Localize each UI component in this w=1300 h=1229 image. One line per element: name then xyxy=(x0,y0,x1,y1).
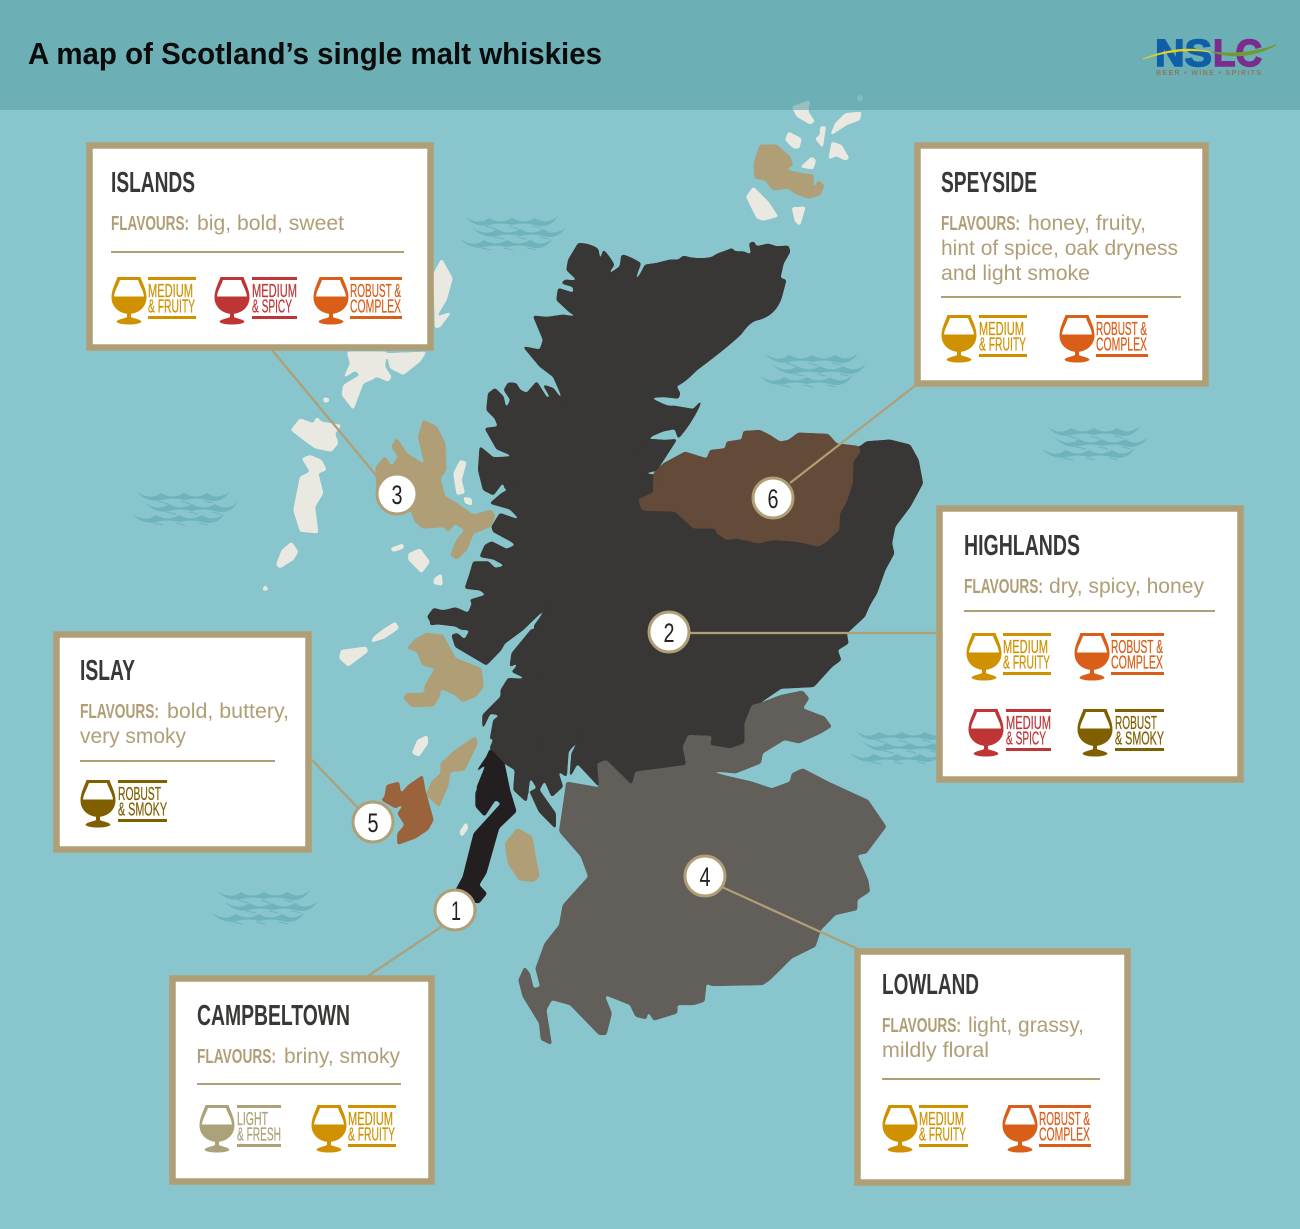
flavours: Speyside: and light smoke xyxy=(941,262,1090,285)
panel: Speyside xyxy=(918,146,1206,384)
flavours: Islay xyxy=(80,700,289,748)
flavours: Islay: bold, buttery, xyxy=(167,700,289,723)
flavours: Islands xyxy=(111,212,344,235)
flavours: Highlands: dry, spicy, honey xyxy=(1049,575,1204,598)
marker 6: 6 xyxy=(768,484,778,514)
badge: medium and fruity: & FRUITY xyxy=(1003,652,1050,672)
Shetland islands xyxy=(746,95,863,226)
flavours: Islay: FLAVOURS: xyxy=(80,701,159,723)
map: Highlands region xyxy=(427,242,923,828)
heading: Islay: ISLAY xyxy=(80,655,135,687)
map: Speyside region xyxy=(638,430,861,547)
badge: medium and fruity: & FRUITY xyxy=(348,1124,395,1144)
marker 4 xyxy=(685,856,725,896)
badge: medium and fruity: MEDIUM xyxy=(148,280,193,301)
waves decoration xyxy=(132,216,1148,924)
badge: medium and spicy: MEDIUM xyxy=(252,280,297,301)
badge: robust and smoky: & SMOKY xyxy=(118,798,167,820)
badge: robust and complex: ROBUST & xyxy=(1096,318,1147,339)
flavours: Speyside xyxy=(941,212,1178,285)
flavours: Highlands: FLAVOURS: xyxy=(964,576,1043,598)
marker 5: 5 xyxy=(368,808,378,838)
flavours: Campbeltown: FLAVOURS: xyxy=(197,1046,276,1068)
heading: Lowland: LOWLAND xyxy=(882,969,979,1001)
badge: robust and complex: ROBUST & xyxy=(350,280,401,301)
flavours: Highlands xyxy=(964,575,1204,598)
flavours: Campbeltown: briny, smoky xyxy=(284,1045,400,1068)
logo: NSLC: LC xyxy=(1213,33,1262,75)
badge: robust and smoky: & SMOKY xyxy=(1115,728,1164,748)
map: Islands region xyxy=(339,420,539,882)
badge: medium and spicy xyxy=(968,709,1051,756)
badge: medium and fruity xyxy=(941,315,1027,362)
badge: medium and fruity: & FRUITY xyxy=(979,334,1026,354)
flavours: Islands: FLAVOURS: xyxy=(111,213,189,235)
map: Campbeltown region (Kintyre) xyxy=(455,748,517,903)
heading: Speyside: SPEYSIDE xyxy=(941,167,1037,199)
badge: medium and fruity xyxy=(882,1105,968,1152)
panel: Campbeltown xyxy=(172,978,432,1182)
flavours: Speyside: hint of spice, oak dryness xyxy=(941,237,1178,260)
badge: medium and spicy: MEDIUM xyxy=(1006,712,1051,733)
badge: medium and spicy: & SPICY xyxy=(1006,728,1046,748)
badge: medium and fruity: MEDIUM xyxy=(919,1108,964,1129)
badge: medium and fruity: MEDIUM xyxy=(979,318,1024,339)
marker 2 xyxy=(649,612,689,652)
badge: medium and fruity xyxy=(311,1105,396,1152)
badge: robust and complex: COMPLEX xyxy=(1096,334,1147,354)
logo: NSLC: NS xyxy=(1155,33,1212,75)
flavours: Campbeltown xyxy=(197,1045,400,1068)
badge: robust and smoky: ROBUST xyxy=(1115,712,1157,733)
marker 4: 4 xyxy=(700,862,710,892)
badge: light and fresh: LIGHT xyxy=(237,1108,268,1129)
badge: medium and fruity: MEDIUM xyxy=(1003,636,1048,657)
flavours: Lowland: mildly floral xyxy=(882,1039,989,1062)
marker 1: 1 xyxy=(451,896,461,926)
logo: NSLC xyxy=(1143,33,1276,77)
badge: robust and complex xyxy=(313,277,402,324)
heading: Campbeltown: CAMPBELTOWN xyxy=(197,1000,350,1032)
badge: light and fresh: & FRESH xyxy=(237,1124,281,1144)
badge: robust and complex: COMPLEX xyxy=(1111,652,1163,672)
badge: medium and fruity xyxy=(111,277,196,324)
badge: medium and fruity xyxy=(966,633,1051,680)
header band xyxy=(0,0,1300,110)
badge: light and fresh xyxy=(199,1105,281,1152)
badge: robust and complex: ROBUST & xyxy=(1039,1108,1090,1129)
marker 3: 3 xyxy=(392,480,402,510)
map: Lowland region xyxy=(518,691,886,1045)
leader lines xyxy=(272,350,938,976)
badge: robust and smoky xyxy=(80,780,167,828)
marker 6 xyxy=(753,478,793,518)
badge: robust and smoky xyxy=(1077,709,1164,756)
Outer Hebrides xyxy=(262,258,472,591)
badge: robust and complex: COMPLEX xyxy=(350,296,401,316)
flavours: Speyside: FLAVOURS: xyxy=(941,213,1020,235)
map: Islay region xyxy=(381,775,434,845)
panel: Islands xyxy=(90,146,430,348)
panel: Islay xyxy=(56,634,308,850)
flavours: Islay: very smoky xyxy=(80,725,186,748)
badge: medium and spicy xyxy=(214,277,297,324)
map: western isles and Shetland xyxy=(262,95,863,591)
flavours: Lowland: FLAVOURS: xyxy=(882,1015,961,1037)
title: A map of Scotland’s single malt whiskies xyxy=(28,36,602,71)
marker 2: 2 xyxy=(664,618,674,648)
badge: medium and fruity: & FRUITY xyxy=(148,296,195,316)
badge: medium and fruity: & FRUITY xyxy=(919,1124,966,1144)
flavours: Lowland: light, grassy, xyxy=(968,1014,1084,1037)
badge: robust and complex: COMPLEX xyxy=(1039,1124,1090,1144)
badge: robust and complex xyxy=(1059,315,1148,362)
flavours: Islands: big, bold, sweet xyxy=(197,212,344,235)
marker 3 xyxy=(377,474,417,514)
flavours: Speyside: honey, fruity, xyxy=(1028,212,1146,235)
logo: NSLC: BEER • WINE • SPIRITS xyxy=(1156,70,1261,77)
panel: Lowland xyxy=(858,952,1128,1182)
badge: medium and spicy: & SPICY xyxy=(252,296,292,316)
heading: Islands: ISLANDS xyxy=(111,167,195,199)
badge: robust and complex xyxy=(1074,633,1164,680)
heading: Highlands: HIGHLANDS xyxy=(964,530,1080,562)
marker 5 xyxy=(353,802,393,842)
badge: robust and complex: ROBUST & xyxy=(1111,636,1163,657)
badge: robust and smoky: ROBUST xyxy=(118,783,161,804)
flavours: Lowland xyxy=(882,1014,1084,1062)
badge: robust and complex xyxy=(1002,1105,1091,1152)
badge: medium and fruity: MEDIUM xyxy=(348,1108,393,1129)
panel: Highlands xyxy=(940,508,1240,780)
marker 1 xyxy=(435,890,475,930)
